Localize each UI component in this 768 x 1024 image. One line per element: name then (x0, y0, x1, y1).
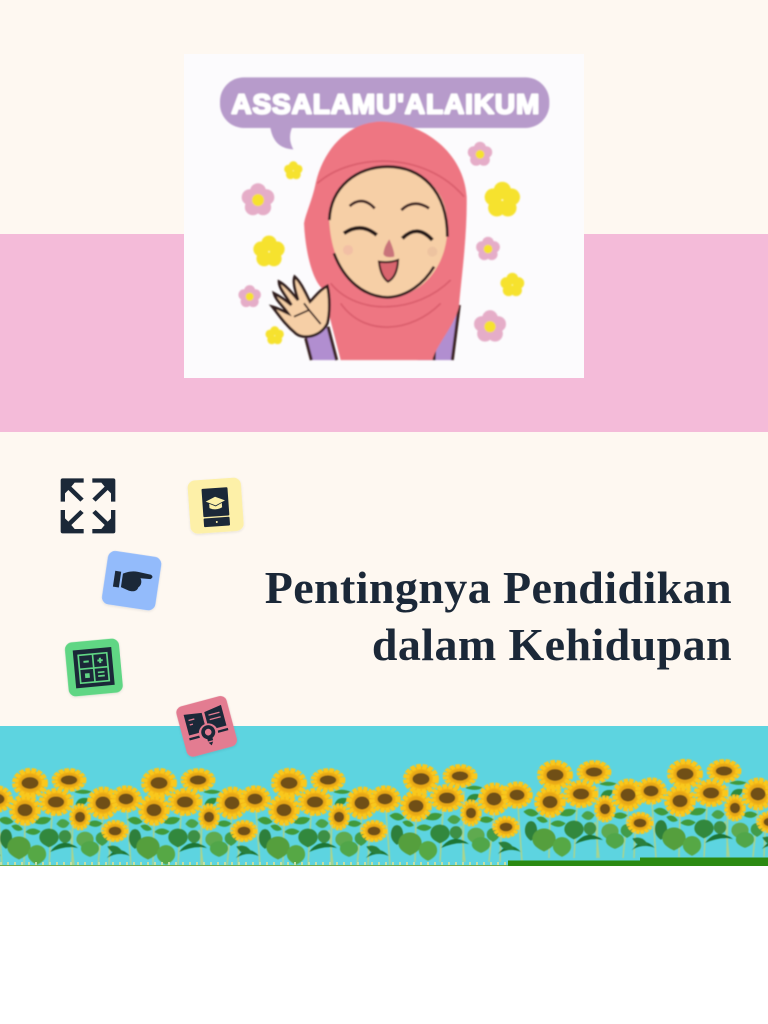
icons group (60, 478, 244, 758)
icon: open book with light bulb (175, 694, 239, 758)
teal band (0, 726, 768, 866)
speech bubble (220, 77, 549, 149)
artwork layer (0, 54, 768, 866)
title: dalam Kehidupan (372, 619, 732, 670)
greeting illustration (184, 54, 584, 378)
speech bubble: ASSALAMU'ALAIKUM (231, 88, 539, 119)
icon: tablet with graduation cap (187, 477, 244, 534)
title: Pentingnya Pendidikan (265, 562, 732, 613)
title (265, 562, 732, 670)
flowers (238, 142, 524, 344)
waving hand (272, 277, 329, 337)
pink band (0, 234, 768, 432)
icon: expand arrows (61, 478, 115, 533)
middle cream panel (0, 432, 768, 726)
icon: pointing hand (101, 550, 162, 611)
character (304, 122, 467, 360)
icon: calculator (64, 638, 123, 697)
sunflower strip (0, 761, 768, 866)
top cream band (0, 0, 768, 234)
